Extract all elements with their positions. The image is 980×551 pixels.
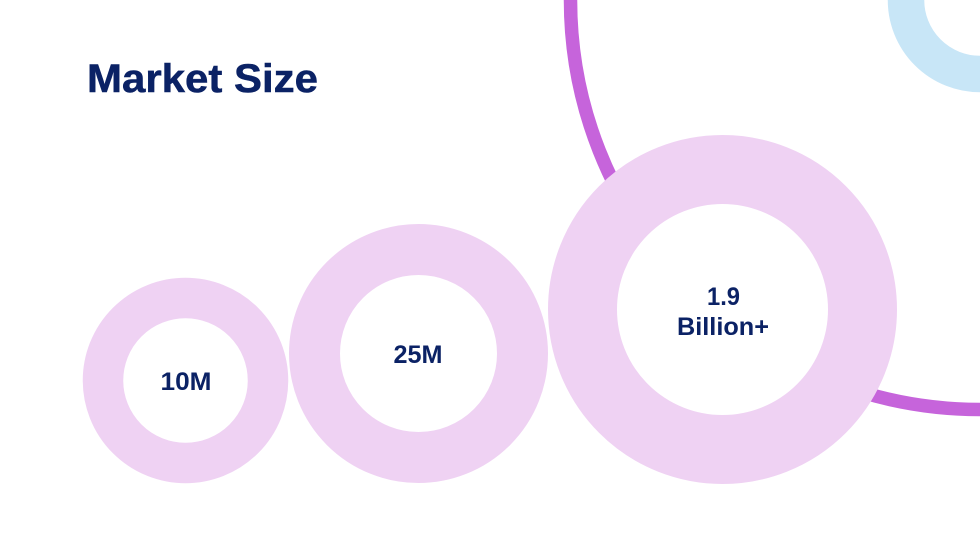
decorative blue ring, top right — [906, 0, 980, 74]
label: 25M: 25M — [394, 341, 442, 369]
label: 10M: 10M — [160, 368, 212, 396]
label: 1.9 Billion+: 1.9 — [707, 283, 740, 311]
ring: 10M market — [103, 298, 268, 463]
title: Market Size — [87, 57, 318, 101]
label: 1.9 Billion+ — [677, 283, 769, 341]
label: 1.9 Billion+: Billion+ — [677, 313, 769, 341]
ring: 1.9 Billion+ market — [582, 170, 862, 450]
decorative purple ring arc — [570, 0, 980, 410]
ring: 25M market — [314, 250, 522, 458]
